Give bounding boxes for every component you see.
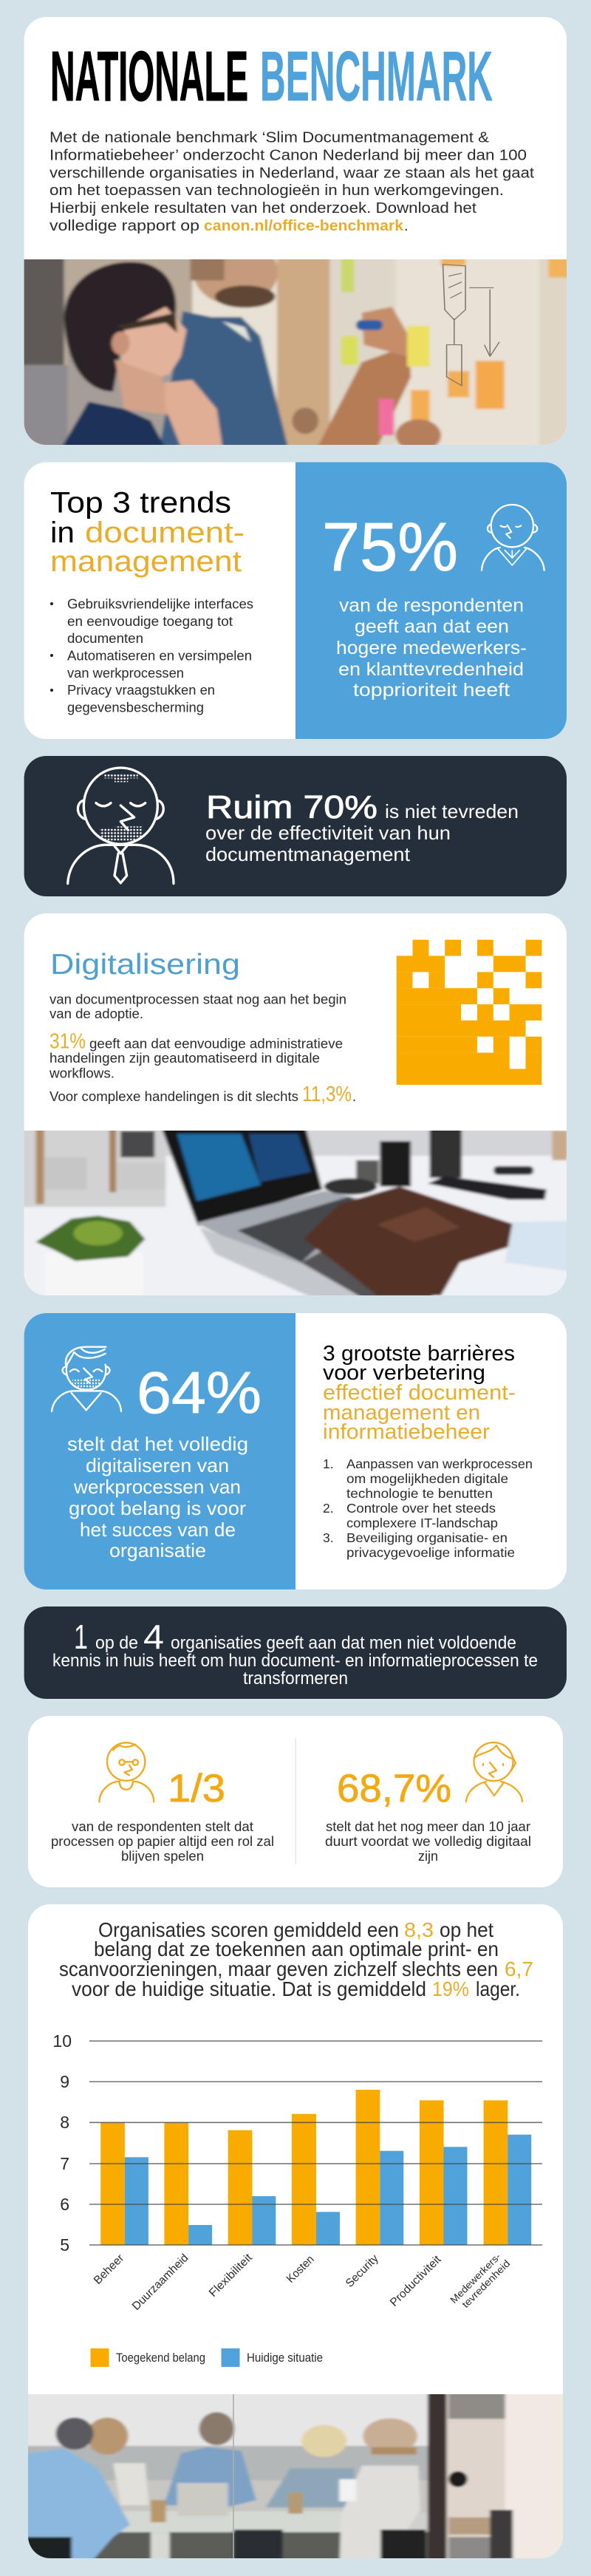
bullet list: van werkprocessen <box>67 666 184 681</box>
text: 1 op de 4: op de <box>95 1633 138 1653</box>
intro text <box>49 130 534 234</box>
photo: people at whiteboard <box>24 259 567 445</box>
intro text: canon.nl/office-benchmark <box>204 218 404 234</box>
panel: ruim 70% <box>24 756 567 896</box>
x axis labels: Productiviteit <box>388 2253 444 2309</box>
text: 1/3 description <box>51 1819 274 1864</box>
bullet list: gegevensbescherming <box>67 701 204 715</box>
text: digitalisering: geeft aan dat eenvoudige administratieve <box>89 1037 343 1052</box>
text: digitalisering <box>49 992 356 1106</box>
text: ruim 70%: is niet tevreden <box>385 800 519 822</box>
numbered list: Beveiliging organisatie- en <box>346 1530 508 1545</box>
x axis labels: Duurzaamheid <box>130 2252 191 2313</box>
heading text: scores: lager. <box>476 1977 520 2000</box>
intro text: Met de nationale benchmark ‘Slim Documentmanagement & <box>49 130 490 146</box>
heading: barriers: voor verbetering <box>323 1361 485 1385</box>
heading: top 3 trends: in <box>50 517 75 549</box>
bullet list: Gebruiksvriendelijke interfaces <box>67 597 253 612</box>
y axis labels: 8 <box>60 2113 69 2132</box>
bullet list: Automatiseren en versimpelen <box>67 649 252 664</box>
heading text: scores: 8,3 <box>404 1918 434 1941</box>
text: digitalisering: 11,3% <box>302 1083 352 1106</box>
text: 64% description: digitaliseren van <box>86 1454 229 1476</box>
numbered list <box>323 1456 533 1560</box>
y axis labels: 6 <box>60 2195 69 2214</box>
text: 75% description: hogere medewerkers- <box>336 638 527 658</box>
stat: 75%: 75% <box>322 508 458 585</box>
icon: man with hair <box>52 1347 121 1411</box>
numbered list: 2. <box>323 1501 334 1516</box>
panel: top 3 trends and 75% <box>24 463 567 739</box>
y axis labels <box>52 2031 72 2255</box>
bars: toegekend belang <box>100 2090 508 2245</box>
intro text: Informatiebeheer’ onderzocht Canon Nederland bij meer dan 100 <box>49 148 527 164</box>
numbered list: 3. <box>323 1530 334 1545</box>
text: 75% description: en klanttevredenheid <box>338 659 524 680</box>
text: 68,7% description: duurt voordat we volledig digitaal <box>325 1834 531 1849</box>
legend: Huidige situatie <box>247 2351 323 2365</box>
x axis labels: tevredenheid <box>460 2258 512 2310</box>
icon: pixel pattern <box>397 940 542 1085</box>
numbered list: Aanpassen van werkprocessen <box>346 1456 533 1471</box>
text: 75% description: geeft aan dat een <box>355 616 509 637</box>
panel: intro <box>7 17 588 459</box>
heading: barriers <box>323 1342 516 1444</box>
y axis labels: 7 <box>60 2154 69 2173</box>
heading text: scores: op het <box>440 1918 493 1941</box>
heading text: scores: belang dat ze toekennen aan optimale print- en <box>94 1938 499 1960</box>
text: digitalisering: van de adoptie. <box>49 1006 143 1021</box>
intro text: om het toepassen van technologieën in hun werkomgevingen. <box>49 183 504 199</box>
numbered list: Controle over het steeds <box>346 1501 496 1516</box>
heading text: scores: scanvoorzieningen, maar geven zichzelf slechts een <box>59 1957 498 1980</box>
heading: barriers: management en <box>323 1401 480 1425</box>
text: 75% description <box>336 596 527 701</box>
text: digitalisering: workflows. <box>49 1066 115 1080</box>
numbered list: technologie te benutten <box>346 1486 493 1501</box>
bars: huidige situatie <box>125 2135 531 2245</box>
text: 75% description: topprioriteit heeft <box>353 680 510 701</box>
legend <box>90 2348 323 2367</box>
text: digitalisering: Voor complexe handelingen is dit slechts <box>49 1089 298 1104</box>
heading text: scores: 19% <box>432 1977 469 2000</box>
text: 75% description: van de respondenten <box>339 596 524 616</box>
text: 1/3 description: processen op papier altijd een rol zal <box>51 1834 274 1849</box>
heading: top 3 trends <box>50 486 245 578</box>
stat: 1/3: 1/3 <box>168 1767 225 1810</box>
text: 64% description: het succes van de <box>80 1519 236 1541</box>
text: 68,7% description <box>325 1819 531 1864</box>
text: ruim 70%: Ruim 70% <box>206 789 378 825</box>
text: 1/3 description: blijven spelen <box>121 1849 204 1864</box>
icon: man 75% <box>482 505 544 570</box>
panel: digitalisering <box>24 913 567 1295</box>
text: digitalisering: 31% <box>49 1030 86 1054</box>
text: 1 op de 4: 1 <box>74 1618 88 1656</box>
heading: top 3 trends: document- <box>85 517 245 549</box>
text: digitalisering: . <box>352 1089 356 1104</box>
x axis labels: Security <box>344 2252 381 2290</box>
heading: barriers: informatiebeheer <box>323 1420 490 1444</box>
y axis labels: 5 <box>60 2235 69 2255</box>
heading: barriers: effectief document- <box>323 1381 516 1405</box>
bullet list <box>50 597 253 715</box>
icon: man with tie <box>68 768 174 884</box>
heading text: scores: voor de huidige situatie. Dat is gemiddeld <box>72 1977 426 2000</box>
panel: 1/3 and 68,7% <box>28 1716 563 1887</box>
photo: meeting room <box>28 2394 563 2558</box>
text: 64% description: werkprocessen van <box>73 1476 241 1498</box>
heading text: scores: 6,7 <box>505 1957 533 1980</box>
bullet list: Privacy vraagstukken en <box>67 683 215 698</box>
x axis labels <box>92 2251 512 2313</box>
panel: 1 op de 4 <box>24 1606 567 1699</box>
x axis labels: Kosten <box>284 2253 317 2286</box>
icon: man with side parting <box>466 1742 522 1802</box>
text: ruim 70%: documentmanagement <box>205 843 411 865</box>
text: ruim 70% <box>205 789 519 865</box>
bar chart <box>52 2031 542 2313</box>
text: 1 op de 4: 4 <box>143 1618 164 1656</box>
y axis labels: 9 <box>60 2072 69 2091</box>
text: 64% description: stelt dat het volledig <box>67 1433 248 1455</box>
text: 1 op de 4: transformeren <box>243 1669 348 1689</box>
x axis labels: Beheer <box>92 2252 126 2287</box>
x axis labels: Medewerkers- <box>448 2251 503 2306</box>
x axis labels: Flexibiliteit <box>207 2251 255 2300</box>
panel: 64% and barriers <box>24 1313 567 1589</box>
text: 68,7% description: zijn <box>418 1849 438 1864</box>
text: ruim 70%: over de effectiviteit van hun <box>205 822 451 844</box>
bullet list: en eenvoudige toegang tot <box>67 614 233 629</box>
stat: 64%: 64% <box>137 1360 262 1425</box>
legend: Toegekend belang <box>116 2351 205 2365</box>
intro text: Hierbij enkele resultaten van het onderzoek. Download het <box>49 200 476 217</box>
heading: top 3 trends: management <box>50 545 242 578</box>
y axis labels: 10 <box>52 2031 72 2051</box>
heading: digitalisering: Digitalisering <box>50 949 240 981</box>
text: 1 op de 4: organisaties geeft aan dat men niet voldoende <box>171 1633 516 1653</box>
text: digitalisering: van documentprocessen staat nog aan het begin <box>49 992 346 1006</box>
title: NATIONALE <box>50 37 248 116</box>
heading: top 3 trends: Top 3 trends <box>50 486 231 519</box>
intro text: verschillende organisaties in Nederland, waar ze staan als het gaat <box>49 165 534 181</box>
heading text: scores <box>59 1918 533 2000</box>
text: 64% description: groot belang is voor <box>69 1497 246 1519</box>
numbered list: privacygevoelige informatie <box>346 1545 515 1560</box>
numbered list: om mogelijkheden digitale <box>346 1471 508 1486</box>
text: 1 op de 4 <box>52 1618 538 1689</box>
panel: chart <box>11 1904 578 2572</box>
numbered list: 1. <box>323 1456 334 1471</box>
heading: barriers: 3 grootste barrières <box>323 1342 515 1366</box>
text: digitalisering: handelingen zijn geautomatiseerd in digitale <box>49 1051 320 1066</box>
text: 64% description: organisatie <box>109 1539 206 1561</box>
icon: man with glasses <box>99 1742 154 1802</box>
text: 64% description <box>67 1433 248 1561</box>
photo: laptop on desk <box>24 1131 567 1295</box>
text: 1 op de 4: kennis in huis heeft om hun document- en informatieprocessen te <box>52 1651 538 1671</box>
intro text: . <box>404 218 409 234</box>
stat: 68,7%: 68,7% <box>337 1767 451 1810</box>
heading text: scores: Organisaties scoren gemiddeld een <box>98 1918 399 1941</box>
text: 1/3 description: van de respondenten stelt dat <box>72 1819 253 1834</box>
intro text: volledige rapport op <box>49 218 199 234</box>
bullet list: documenten <box>67 631 143 646</box>
numbered list: complexere IT-landschap <box>346 1516 498 1530</box>
text: 68,7% description: stelt dat het nog meer dan 10 jaar <box>326 1819 530 1834</box>
